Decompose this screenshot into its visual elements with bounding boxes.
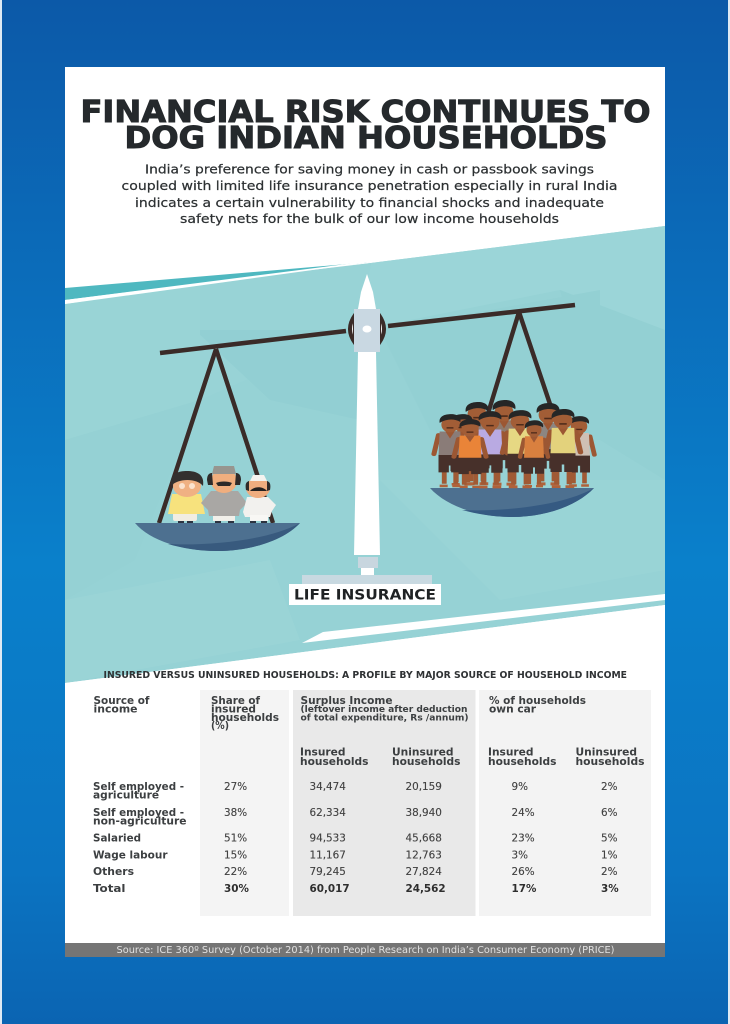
source footer bar <box>65 943 665 957</box>
life insurance label: LIFE INSURANCE <box>294 588 436 604</box>
man in yellow kurta <box>168 471 205 523</box>
life insurance label <box>289 584 441 605</box>
row: others: 2% <box>601 866 618 878</box>
row: salaried: 45,668 <box>406 832 442 844</box>
header: surplus income: of total expenditure, Rs /annum) <box>300 714 469 724</box>
header: percent of households own car: own car <box>489 704 537 716</box>
balance scale <box>135 274 575 585</box>
header: source of income: income <box>94 704 138 716</box>
sub-headers: insured and uninsured: Uninsured <box>392 746 454 758</box>
header: surplus income <box>300 695 469 724</box>
title <box>80 95 650 156</box>
title: FINANCIAL RISK CONTINUES TO <box>80 95 650 130</box>
row: salaried: 5% <box>601 832 618 844</box>
header: share of insured households: households <box>211 712 279 724</box>
column panel: surplus income <box>293 690 476 916</box>
row: total: 17% <box>512 883 537 895</box>
man in grey achkan <box>201 466 247 523</box>
row: self employed non-agriculture: 38% <box>224 807 247 819</box>
intro paragraph: indicates a certain vulnerability to financial shocks and inadequate <box>135 195 604 210</box>
row: total <box>93 883 619 895</box>
left hanger and pan <box>135 349 300 551</box>
white poster panel <box>65 67 665 957</box>
row: self employed agriculture: Self employed - <box>93 781 184 793</box>
row: self employed non-agriculture: Self employed - <box>93 807 184 819</box>
row: wage labour: 15% <box>224 850 247 862</box>
source footer bar: Source: ICE 360º Survey (October 2014) from People Research on India’s Consumer Economy (PRICE) <box>116 945 614 956</box>
row: self employed agriculture: 20,159 <box>406 781 442 793</box>
crowd of low-income labourers on right pan <box>434 400 594 488</box>
row: salaried: 23% <box>512 832 535 844</box>
row: salaried <box>93 832 618 844</box>
row: wage labour: 12,763 <box>406 850 442 862</box>
right pan <box>430 488 594 517</box>
row: self employed agriculture: 2% <box>601 781 618 793</box>
header: surplus income: Surplus Income <box>300 695 392 707</box>
row: wage labour: Wage labour <box>93 850 168 862</box>
intro paragraph: India’s preference for saving money in cash or passbook savings <box>145 162 594 176</box>
row: wage labour: 11,167 <box>310 850 346 862</box>
row: self employed non-agriculture: 62,334 <box>310 807 346 819</box>
row: total: 24,562 <box>406 883 446 895</box>
column panel: share of insured <box>200 690 289 916</box>
header: surplus income: (leftover income after deduction <box>300 705 468 715</box>
title: DOG INDIAN HOUSEHOLDS <box>124 121 608 156</box>
row: self employed agriculture <box>93 781 618 802</box>
row: self employed agriculture: agriculture <box>93 790 159 802</box>
top teal accent stripe <box>65 262 371 304</box>
row: total: 60,017 <box>310 883 350 895</box>
man in white kurta <box>243 475 276 523</box>
sub-headers: insured and uninsured <box>300 746 644 768</box>
header: percent of households own car: % of households <box>489 695 586 707</box>
row: wage labour <box>93 850 618 862</box>
row: others: 79,245 <box>310 866 346 878</box>
scale pillar <box>302 274 432 585</box>
header: source of income <box>94 695 150 716</box>
header: share of insured households: (%) <box>211 720 229 732</box>
row: total: 3% <box>601 883 619 895</box>
sub-headers: insured and uninsured: households <box>300 756 368 768</box>
intro paragraph <box>122 162 618 226</box>
right hanger <box>486 312 552 420</box>
row: others: 27,824 <box>406 866 442 878</box>
row: total: Total <box>93 883 126 895</box>
lower white stripe <box>302 594 665 643</box>
row: others: 26% <box>512 866 535 878</box>
sub-headers: insured and uninsured: Uninsured <box>576 746 637 758</box>
column panel: households own car <box>479 690 651 916</box>
row: self employed non-agriculture: 38,940 <box>406 807 442 819</box>
sub-headers: insured and uninsured: Insured <box>300 746 346 758</box>
header: source of income: Source of <box>94 695 150 707</box>
row: self employed agriculture: 34,474 <box>310 781 346 793</box>
data table <box>93 690 651 916</box>
sub-headers: insured and uninsured: households <box>576 756 644 768</box>
row: wage labour: 3% <box>512 850 528 862</box>
row: salaried: 51% <box>224 832 247 844</box>
sub-headers: insured and uninsured: Insured <box>488 746 534 758</box>
header: share of insured households: Share of <box>211 695 260 707</box>
header: percent of households own car <box>489 695 586 716</box>
sub-headers: insured and uninsured: households <box>392 756 460 768</box>
scale beam <box>160 305 575 353</box>
sub-headers: insured and uninsured: households <box>488 756 556 768</box>
header: share of insured households: insured <box>211 704 256 716</box>
row: others: 22% <box>224 866 247 878</box>
row: wage labour: 1% <box>601 850 618 862</box>
teal faceted backdrop <box>65 226 665 683</box>
header: share of insured households <box>211 695 279 732</box>
row: self employed non-agriculture: 6% <box>601 807 618 819</box>
row: self employed non-agriculture: non-agriculture <box>93 816 186 828</box>
intro paragraph: safety nets for the bulk of our low income households <box>180 211 559 226</box>
white lower cut of backdrop <box>65 605 665 700</box>
row: salaried: 94,533 <box>310 832 346 844</box>
row: self employed non-agriculture: 24% <box>512 807 535 819</box>
row: total: 30% <box>224 883 249 895</box>
table heading: INSURED VERSUS UNINSURED HOUSEHOLDS: A PROFILE BY MAJOR SOURCE OF HOUSEHOLD INCOME <box>104 670 627 681</box>
row: self employed non-agriculture <box>93 807 618 828</box>
row: others: Others <box>93 866 134 878</box>
row: self employed agriculture: 9% <box>512 781 528 793</box>
row: others <box>93 866 618 878</box>
row: salaried: Salaried <box>93 832 141 844</box>
three well-off men on left pan <box>168 466 276 523</box>
row: self employed agriculture: 27% <box>224 781 247 793</box>
intro paragraph: coupled with limited life insurance penetration especially in rural India <box>122 178 618 193</box>
